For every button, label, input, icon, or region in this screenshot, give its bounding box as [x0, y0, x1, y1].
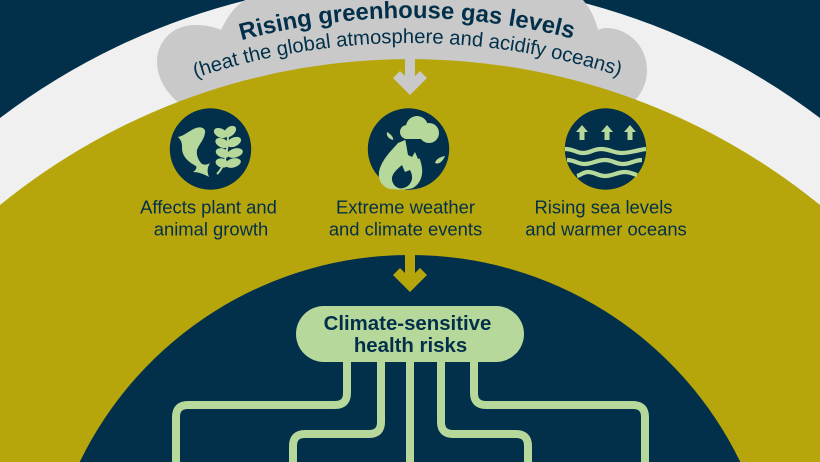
icon: fire and storm cloud — [368, 108, 449, 190]
health risks pill — [296, 306, 524, 362]
icon: fish and plant — [170, 108, 251, 190]
pill label: health risks — [354, 335, 467, 357]
label: plant and animal growth: Affects plant and — [140, 196, 277, 218]
arrow: cloud to effects — [393, 58, 427, 95]
label: extreme weather: and climate events — [329, 218, 482, 240]
cloud — [157, 0, 647, 110]
connector lines — [176, 360, 645, 462]
cloud subheading: (heat the global atmosphere and acidify oceans) — [194, 28, 621, 80]
inner health dome — [80, 255, 740, 462]
pill label: Climate-sensitive — [324, 313, 491, 335]
label: sea levels: Rising sea levels — [534, 196, 672, 218]
label: sea levels: and warmer oceans — [525, 218, 687, 240]
label: plant and animal growth: animal growth — [154, 218, 268, 240]
icon: rising sea levels — [565, 108, 646, 190]
label: extreme weather: Extreme weather — [336, 196, 475, 218]
arrow: effects to health risks — [393, 250, 427, 292]
